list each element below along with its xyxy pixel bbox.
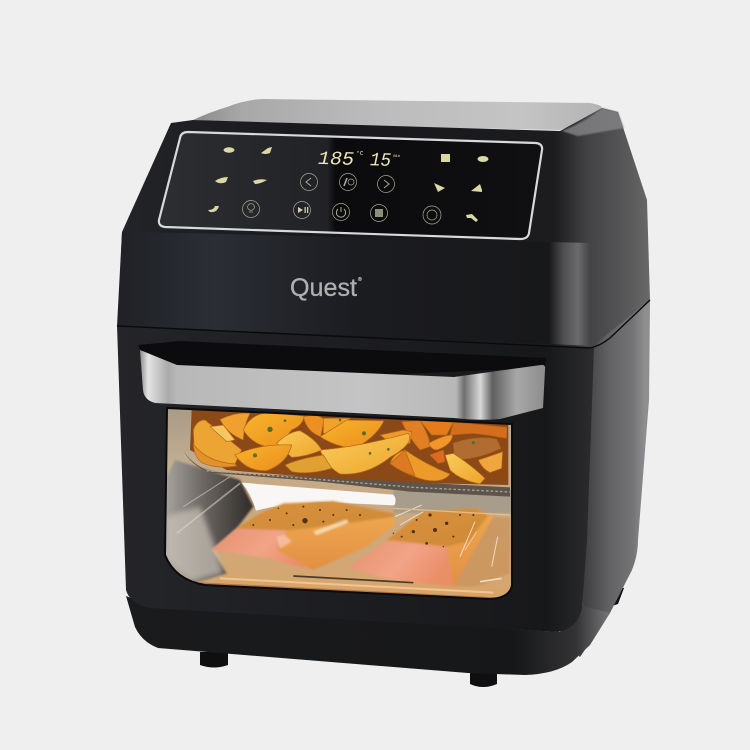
white reflection	[242, 483, 396, 511]
door recess	[138, 341, 546, 378]
pepper specks	[252, 506, 474, 547]
salmon fillet: right	[348, 508, 510, 587]
window frame	[165, 408, 512, 599]
touch buttons	[242, 174, 441, 224]
interior floor and rear wall	[166, 424, 511, 598]
wall fog	[165, 507, 223, 582]
front band	[118, 232, 597, 346]
brand logo: Quest	[290, 274, 357, 302]
shell top rim	[562, 108, 624, 136]
seam	[117, 300, 650, 348]
temperature and time display: min	[393, 154, 401, 159]
temperature and time display: 15	[370, 149, 391, 172]
rear wall band	[393, 490, 513, 513]
dark glow behind food	[190, 410, 508, 485]
herb specks	[253, 419, 475, 457]
wedges: centre	[390, 450, 450, 481]
foot: right	[470, 670, 497, 687]
wedges: left	[285, 455, 332, 473]
air fryer	[117, 99, 650, 687]
illustration: air fryer oven	[117, 99, 650, 687]
foot: left	[200, 652, 228, 668]
interior left wall	[165, 460, 253, 583]
side panel: lower	[563, 300, 650, 657]
temperature and time display: °C	[356, 150, 364, 157]
potato wedges	[193, 413, 507, 484]
control panel	[159, 132, 542, 239]
oven window	[166, 409, 511, 598]
lid	[193, 99, 602, 130]
brand logo: ®	[358, 276, 362, 283]
interior upper wall	[168, 409, 192, 472]
temperature and time display	[318, 148, 401, 172]
salmon fillet: left	[212, 501, 395, 570]
floor reflections	[193, 576, 510, 599]
touch panel glass	[159, 132, 542, 239]
wall streaks	[177, 477, 240, 533]
rear notch	[612, 587, 624, 606]
window glare	[393, 505, 510, 582]
temperature and time display: 185	[318, 148, 354, 171]
button glyphs	[298, 207, 383, 217]
upper shell	[117, 108, 650, 348]
door body	[117, 325, 594, 632]
base	[126, 596, 610, 675]
preset icons: right	[434, 154, 488, 222]
steel handle	[140, 350, 545, 420]
preset icons: left	[208, 147, 272, 212]
wire tray	[183, 450, 510, 497]
wedges: right	[402, 421, 430, 450]
